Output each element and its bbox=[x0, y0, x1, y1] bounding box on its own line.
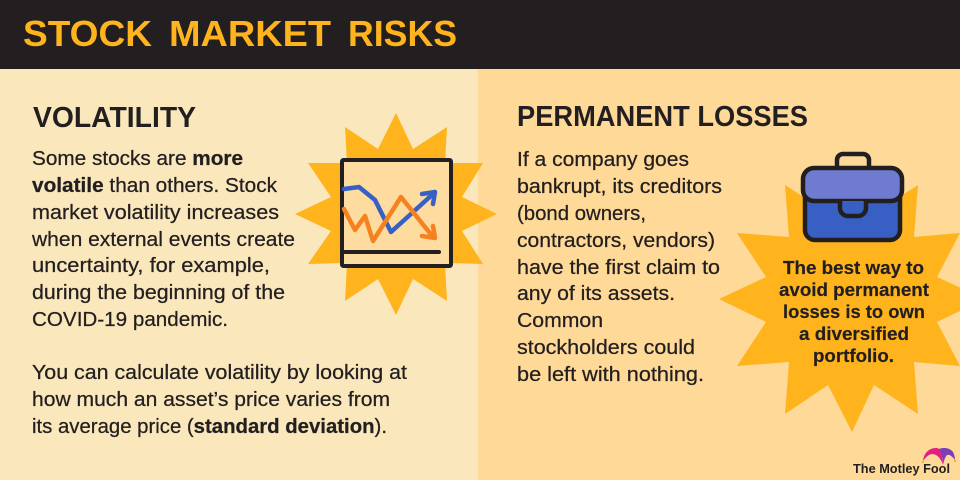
text block: permanent losses description: stockholders could bbox=[517, 337, 695, 359]
logo: The Motley Fool bbox=[853, 448, 956, 476]
text block: permanent losses description: contractors, vendors) bbox=[517, 230, 715, 252]
heading: permanent losses: PERMANENT LOSSES bbox=[517, 101, 808, 133]
title banner: MARKET bbox=[169, 13, 331, 54]
text block: permanent losses description: If a company goes bbox=[517, 149, 689, 171]
callout: starburst with diversification advice: a diversified bbox=[799, 323, 909, 344]
panel: volatility background bbox=[0, 69, 478, 480]
text block: permanent losses description: be left with nothing. bbox=[517, 364, 704, 386]
callout: starburst with diversification advice: portfolio. bbox=[813, 345, 894, 366]
text block: calculating volatility: You can calculate volatility by looking at bbox=[32, 362, 407, 384]
text block: permanent losses description: have the first claim to bbox=[517, 257, 720, 279]
text block: volatility description bbox=[31, 148, 295, 331]
text block: permanent losses description: Common bbox=[517, 310, 603, 332]
text block: volatility description: market volatility increases bbox=[32, 202, 279, 224]
callout: starburst with diversification advice: losses is to own bbox=[783, 301, 925, 322]
title banner bbox=[0, 0, 960, 69]
title banner: STOCK bbox=[23, 13, 152, 54]
text block: volatility description: COVID-19 pandemic. bbox=[32, 309, 228, 331]
icon: briefcase bbox=[803, 154, 902, 240]
text block: calculating volatility bbox=[32, 362, 407, 438]
callout: starburst with diversification advice bbox=[719, 166, 960, 432]
heading: volatility: VOLATILITY bbox=[33, 102, 196, 134]
text block: permanent losses description bbox=[517, 149, 722, 386]
text block: volatility description: uncertainty, for example, bbox=[32, 255, 270, 277]
text block: volatility description: during the beginning of the bbox=[32, 282, 285, 304]
text block: volatility description: Some stocks are more bbox=[32, 148, 243, 170]
title banner: RISKS bbox=[348, 13, 457, 54]
logo: The Motley Fool: The Motley Fool bbox=[853, 461, 950, 476]
icon: starburst with volatile chart bbox=[295, 113, 497, 315]
callout: starburst with diversification advice: The best way to bbox=[783, 257, 924, 278]
callout: starburst with diversification advice: avoid permanent bbox=[779, 279, 929, 300]
panel: permanent losses background bbox=[478, 69, 960, 480]
text block: calculating volatility: its average price (standard deviation). bbox=[32, 416, 387, 438]
text block: permanent losses description: any of its assets. bbox=[517, 283, 675, 305]
text block: volatility description: when external events create bbox=[31, 229, 295, 251]
text block: calculating volatility: how much an asset’s price varies from bbox=[32, 389, 390, 411]
text block: permanent losses description: (bond owners, bbox=[517, 203, 646, 225]
text block: permanent losses description: bankrupt, its creditors bbox=[517, 176, 722, 198]
text block: volatility description: volatile than others. Stock bbox=[32, 175, 278, 197]
